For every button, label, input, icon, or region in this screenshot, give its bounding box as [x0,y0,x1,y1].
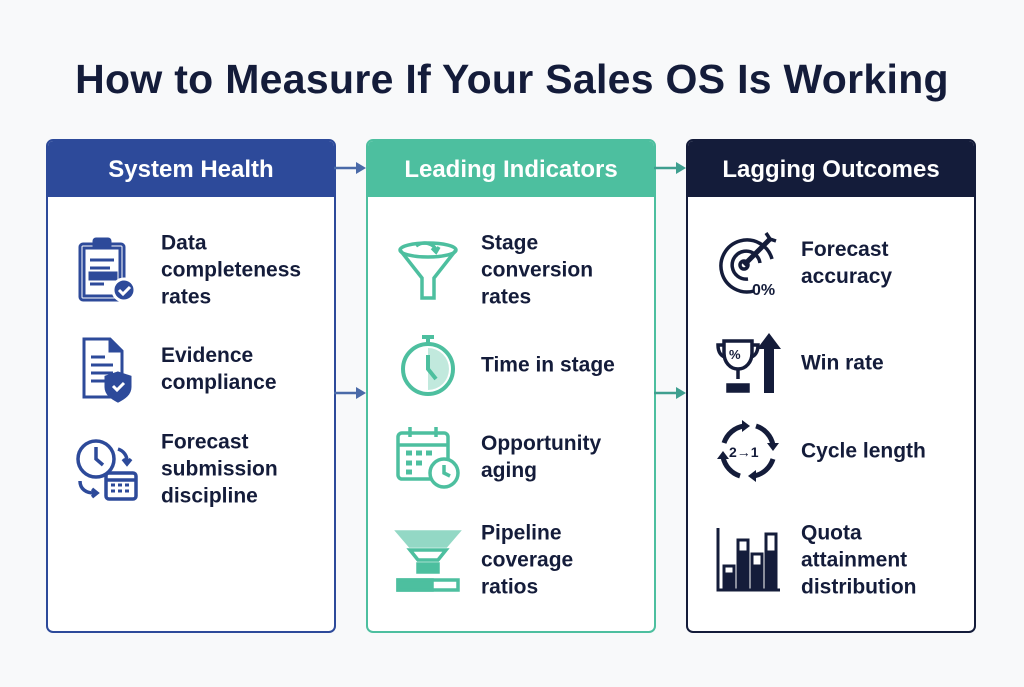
panel: system health: Evidence [161,344,253,367]
item: pipeline coverage [394,522,573,598]
arrow: health to leading bottom [334,387,366,399]
icon: cycle: 2→1 [729,444,759,460]
header: lagging outcomes: Lagging Outcomes [722,156,940,183]
panel: lagging outcomes: Forecast [801,238,889,261]
panel: system health [46,139,336,633]
icon: trophy arrow [716,333,781,393]
item: win rate: Win rate [801,352,884,374]
title: How to Measure If Your Sales OS Is Working [75,56,949,102]
item: stage conversion [398,232,593,308]
item: quota attainment: attainment [801,548,907,572]
header: system health [48,141,334,197]
item: forecast submission [76,430,278,508]
icon: bar chart [716,528,780,592]
panel: leading indicators: Opportunity [481,432,601,455]
arrow: health to leading top [334,162,366,174]
arrow: leading to lagging top [654,162,686,174]
panel: leading indicators: ratios [481,576,538,598]
item: time in stage [401,335,615,396]
icon: cycle [717,420,779,482]
item: opportunity aging [396,427,601,489]
item: time in stage: Time in stage [481,354,615,376]
item: forecast accuracy [719,232,892,297]
item: evidence compliance [82,338,277,403]
panel: leading indicators: Pipeline [481,522,562,544]
icon: clock calendar [76,439,138,501]
arrow: leading to lagging bottom [654,387,686,399]
header: leading indicators: Leading Indicators [404,156,618,183]
panel: leading indicators: aging [481,459,537,482]
item: cycle length: Cycle length [801,440,926,462]
icon: calendar clock [396,427,460,489]
item: win rate [716,333,884,393]
item: forecast submission: submission [161,458,278,480]
panel: lagging outcomes: accuracy [801,265,892,288]
item: data completeness [78,232,301,308]
icon: clipboard [78,238,134,302]
panel: system health: Data [161,232,207,254]
item: stage conversion: conversion [481,258,593,282]
panel: leading indicators: Stage [481,232,538,254]
panel: lagging outcomes: Quota [801,522,862,544]
icon: funnel [398,241,458,300]
header: lagging outcomes [688,141,974,197]
icon: target [719,232,776,297]
icon: document shield [82,338,132,403]
panel: system health: rates [161,286,211,308]
header: system health: System Health [108,156,274,183]
item: pipeline coverage: coverage [481,548,573,572]
panel: system health: compliance [161,371,277,394]
panel: system health: discipline [161,484,258,508]
item: quota attainment [716,522,916,598]
icon: pipeline funnel [394,530,462,592]
item: cycle length [717,420,926,482]
item: data completeness: completeness [161,258,301,282]
panel: leading indicators: rates [481,286,531,308]
panel: lagging outcomes: distribution [801,576,916,598]
panel: lagging outcomes [686,139,976,633]
panel: leading indicators [366,139,656,633]
icon: stopwatch [401,335,455,396]
panel: system health: Forecast [161,430,249,454]
header: leading indicators [368,141,654,197]
icon: trophy arrow: % [729,347,741,362]
